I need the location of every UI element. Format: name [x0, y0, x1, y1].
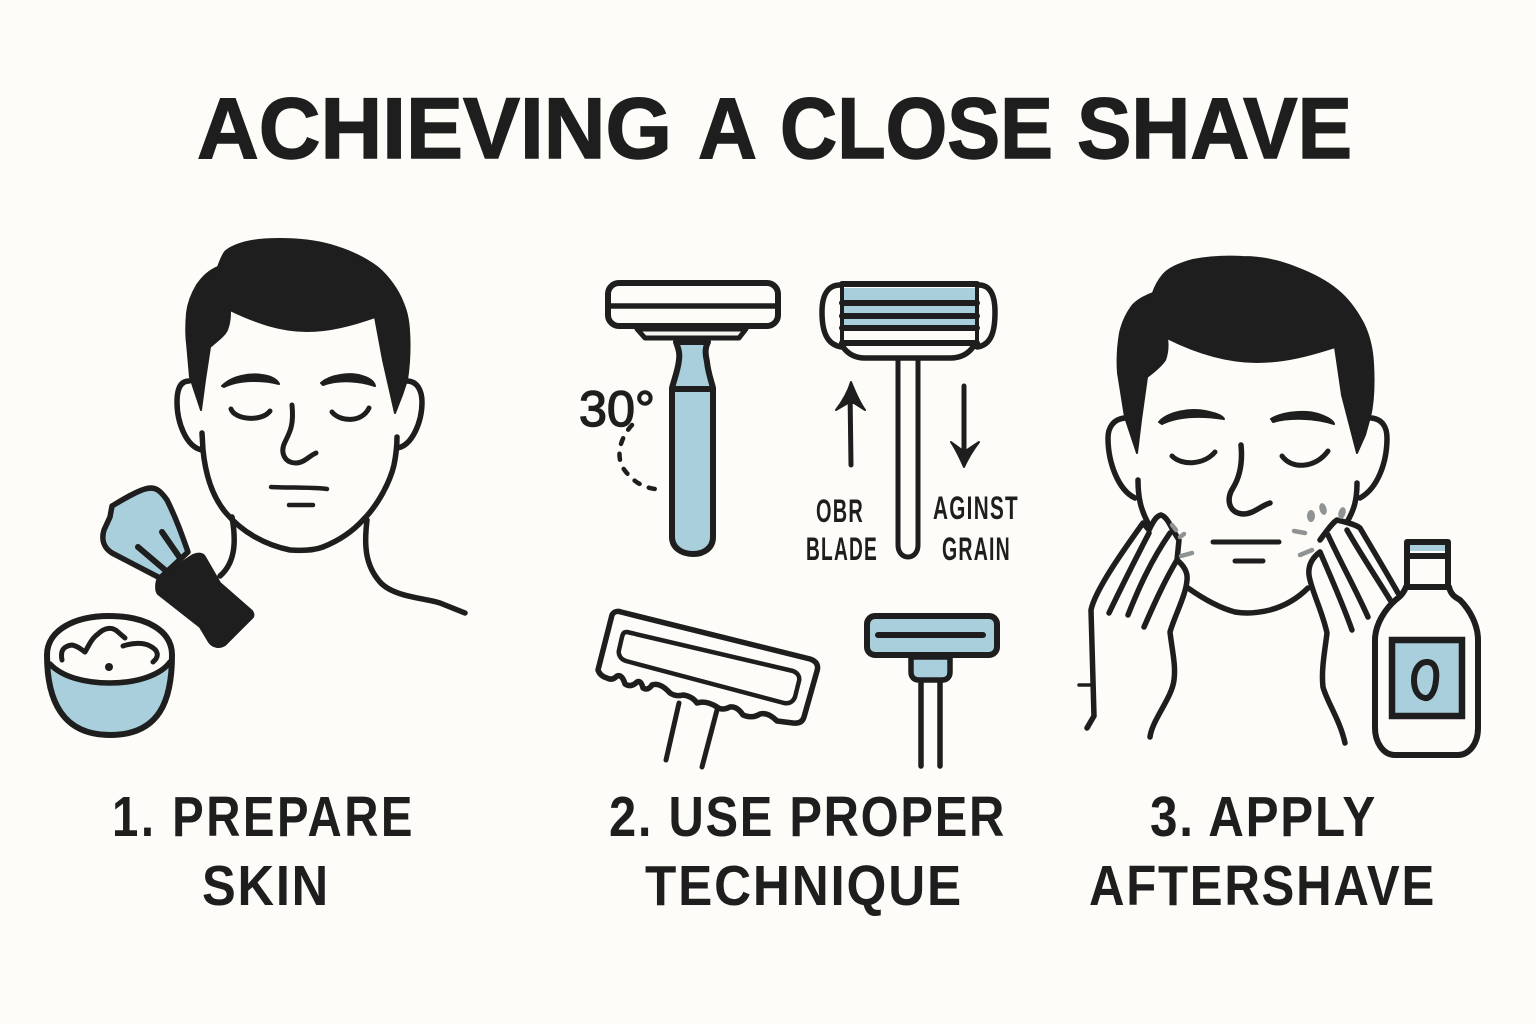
arrow down: [962, 386, 966, 455]
eyes: [1172, 452, 1215, 463]
mouth: [1213, 540, 1279, 544]
face and chin: [1138, 480, 1148, 523]
label: step 3: 3. APPLY: [1150, 785, 1377, 849]
label: step 2: TECHNIQUE: [645, 854, 963, 918]
panel: step 1 prepare skin: [47, 239, 465, 918]
icon: shaving cream bowl: [47, 616, 172, 735]
handle: [156, 554, 254, 647]
face outline: [202, 433, 397, 550]
handle: [898, 360, 918, 557]
panel: step 3 apply aftershave: [1079, 257, 1478, 918]
brows: [222, 374, 279, 387]
labels: OBR: [816, 493, 864, 529]
icon: three blade razor with direction arrows: BLADE: [806, 531, 878, 567]
title: ACHIEVING: [197, 81, 672, 177]
hair: [186, 239, 410, 413]
foam: [61, 628, 125, 660]
icon: three blade razor with direction arrows: [806, 284, 1019, 567]
mouth: [271, 487, 327, 489]
right hand: [1320, 520, 1398, 593]
icon: shaving brush: [103, 488, 254, 647]
icon: man's face with hands on cheeks: [1079, 257, 1398, 743]
hair: [1118, 257, 1374, 453]
bristles: [103, 488, 188, 578]
icon: tilted razor with serrated edge: [598, 611, 818, 767]
bottle cap: [1409, 543, 1446, 551]
icon: razor at thirty degrees: [579, 283, 778, 554]
neck and shoulder: [220, 517, 234, 576]
label: step 2: 2. USE PROPER: [609, 785, 1006, 849]
icon: man's face with closed eyes: [177, 239, 465, 613]
label: step 1: 1. PREPARE: [112, 785, 415, 849]
blade head: [842, 284, 977, 343]
gray splash marks: [1172, 525, 1312, 556]
bottle label: [1392, 640, 1462, 716]
title: CLOSE: [780, 81, 1053, 177]
title: SHAVE: [1077, 81, 1352, 177]
bottle body: [1375, 587, 1478, 755]
brows: [1159, 410, 1224, 424]
razor head: [608, 283, 778, 326]
panel: step 2 use proper technique: [579, 283, 1019, 918]
angle label: 30°: [579, 381, 655, 437]
label: step 3: [1089, 785, 1436, 918]
ears: [177, 381, 202, 450]
icon: three blade razor with direction arrows: AGINST: [933, 490, 1019, 526]
label emblem: [1414, 662, 1436, 698]
eyes: [231, 409, 270, 418]
label: step 1: [112, 785, 415, 918]
ears: [1108, 418, 1135, 498]
label: step 1: SKIN: [202, 854, 330, 918]
icon: front view razor: [867, 616, 997, 766]
razor neck and handle: [672, 342, 713, 554]
icon: aftershave bottle: [1375, 542, 1478, 755]
left hand: [1087, 515, 1187, 737]
nose: [1229, 445, 1270, 514]
icon: three blade razor with direction arrows: GRAIN: [942, 531, 1011, 567]
title: [197, 81, 1352, 177]
title: A: [698, 81, 757, 177]
dotted angle arc: [619, 425, 655, 489]
label: step 3: AFTERSHAVE: [1089, 854, 1436, 918]
nose: [283, 405, 316, 463]
blade strips: [842, 288, 977, 301]
arrow up: [850, 390, 851, 465]
label: step 2: [609, 785, 1006, 918]
